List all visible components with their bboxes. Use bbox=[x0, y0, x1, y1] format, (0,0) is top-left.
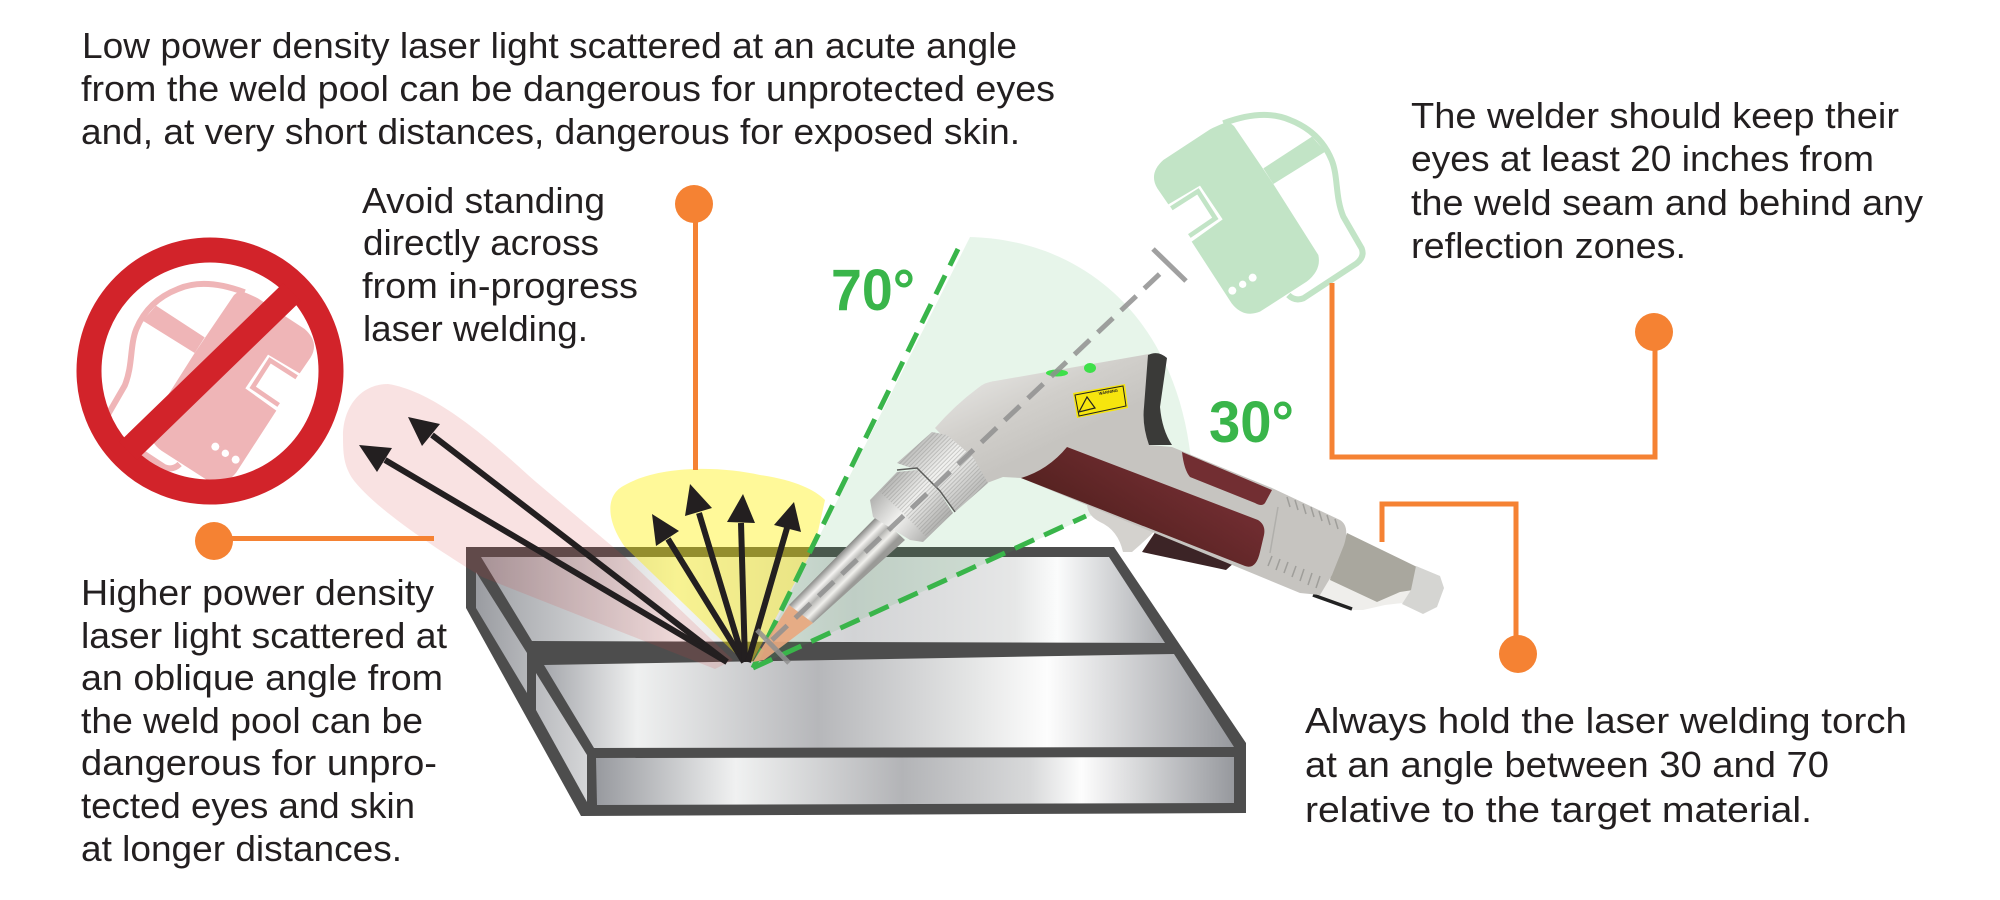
scatter zone: yellow acute bbox=[610, 469, 825, 662]
text: torch angle instruction bbox=[1305, 700, 1907, 830]
text: avoid standing across: directly across bbox=[363, 222, 599, 263]
text: higher power density warning bbox=[81, 572, 447, 869]
torch: under grip bbox=[1142, 531, 1235, 570]
icon: metal plates being welded bbox=[466, 547, 1246, 816]
text: higher power density warning: laser light scattered at bbox=[81, 615, 447, 656]
text: torch angle instruction: relative to the target material. bbox=[1305, 789, 1812, 830]
torch: rubber back strip bbox=[1144, 353, 1172, 445]
torch: red upper inlay bbox=[1182, 452, 1272, 505]
text: higher power density warning: at longer distances. bbox=[81, 828, 402, 869]
callout: higher density leader bbox=[195, 522, 434, 560]
torch: green indicator left bbox=[1046, 370, 1068, 376]
text: low power density warning: Low power density laser light scattered at an acute angle bbox=[82, 25, 1017, 66]
text: low power density warning: from the weld pool can be dangerous for unprotected eyes bbox=[81, 68, 1055, 109]
icon: prohibited position helmet bbox=[89, 250, 331, 492]
text: higher power density warning: Higher power density bbox=[81, 572, 434, 613]
line of sight: grey dashed bbox=[757, 249, 1186, 663]
torch: warning label bbox=[1073, 384, 1128, 418]
torch: green indicator right bbox=[1084, 363, 1096, 373]
arrows: acute scatter bbox=[652, 484, 801, 662]
torch: upper knurled nut bbox=[897, 432, 988, 512]
text: avoid standing across: from in-progress bbox=[362, 265, 638, 306]
callout: helmet leader bbox=[1332, 283, 1673, 457]
angle lines: green dashed limits bbox=[753, 249, 1086, 668]
angle wedge: 30 to 70 degrees bbox=[753, 237, 1192, 668]
text: avoid standing across: Avoid standing bbox=[362, 180, 605, 221]
text: higher power density warning: dangerous for unpro- bbox=[81, 742, 437, 783]
text: welder eye distance: the weld seam and behind any bbox=[1411, 182, 1923, 223]
torch: warning label: WARNING bbox=[1098, 388, 1118, 396]
callout: low density leader bbox=[675, 185, 713, 470]
torch: main body bbox=[935, 354, 1346, 595]
text: low power density warning: and, at very short distances, dangerous for exposed skin. bbox=[81, 111, 1020, 152]
torch: trigger bbox=[1087, 505, 1156, 552]
text: welder eye distance: reflection zones. bbox=[1411, 225, 1686, 266]
text: welder eye distance: eyes at least 20 inches from bbox=[1411, 138, 1874, 179]
text: higher power density warning: tected eyes and skin bbox=[81, 785, 415, 826]
text: avoid standing across: laser welding. bbox=[363, 308, 588, 349]
text: torch angle instruction: Always hold the laser welding torch bbox=[1305, 700, 1907, 741]
callout: torch leader bbox=[1382, 504, 1537, 673]
text: welder eye distance: The welder should keep their bbox=[1411, 95, 1899, 136]
text: higher power density warning: the weld pool can be bbox=[81, 700, 423, 741]
torch: rear ribs bbox=[1268, 497, 1338, 588]
text: higher power density warning: an oblique angle from bbox=[81, 657, 443, 698]
icon: correct position helmet bbox=[1154, 115, 1363, 314]
scatter zone: pink oblique bbox=[343, 384, 733, 669]
label: 30 degrees: 30° bbox=[1209, 390, 1294, 455]
text: low power density warning bbox=[81, 25, 1055, 152]
torch: copper nozzle bbox=[753, 605, 813, 662]
arrows: oblique scatter bbox=[359, 417, 727, 662]
torch: rear housing bbox=[1313, 533, 1417, 610]
icon: laser welding torch bbox=[753, 353, 1444, 662]
text: torch angle instruction: at an angle between 30 and 70 bbox=[1305, 744, 1829, 785]
torch: shaft bbox=[789, 515, 905, 623]
torch: lower knurled nut bbox=[870, 468, 955, 542]
label: 70 degrees: 70° bbox=[831, 258, 915, 323]
torch: rear knurled cap bbox=[1402, 566, 1444, 614]
text: welder eye distance bbox=[1411, 95, 1923, 266]
text: avoid standing across bbox=[362, 180, 638, 349]
torch: red grip bbox=[1021, 447, 1264, 567]
